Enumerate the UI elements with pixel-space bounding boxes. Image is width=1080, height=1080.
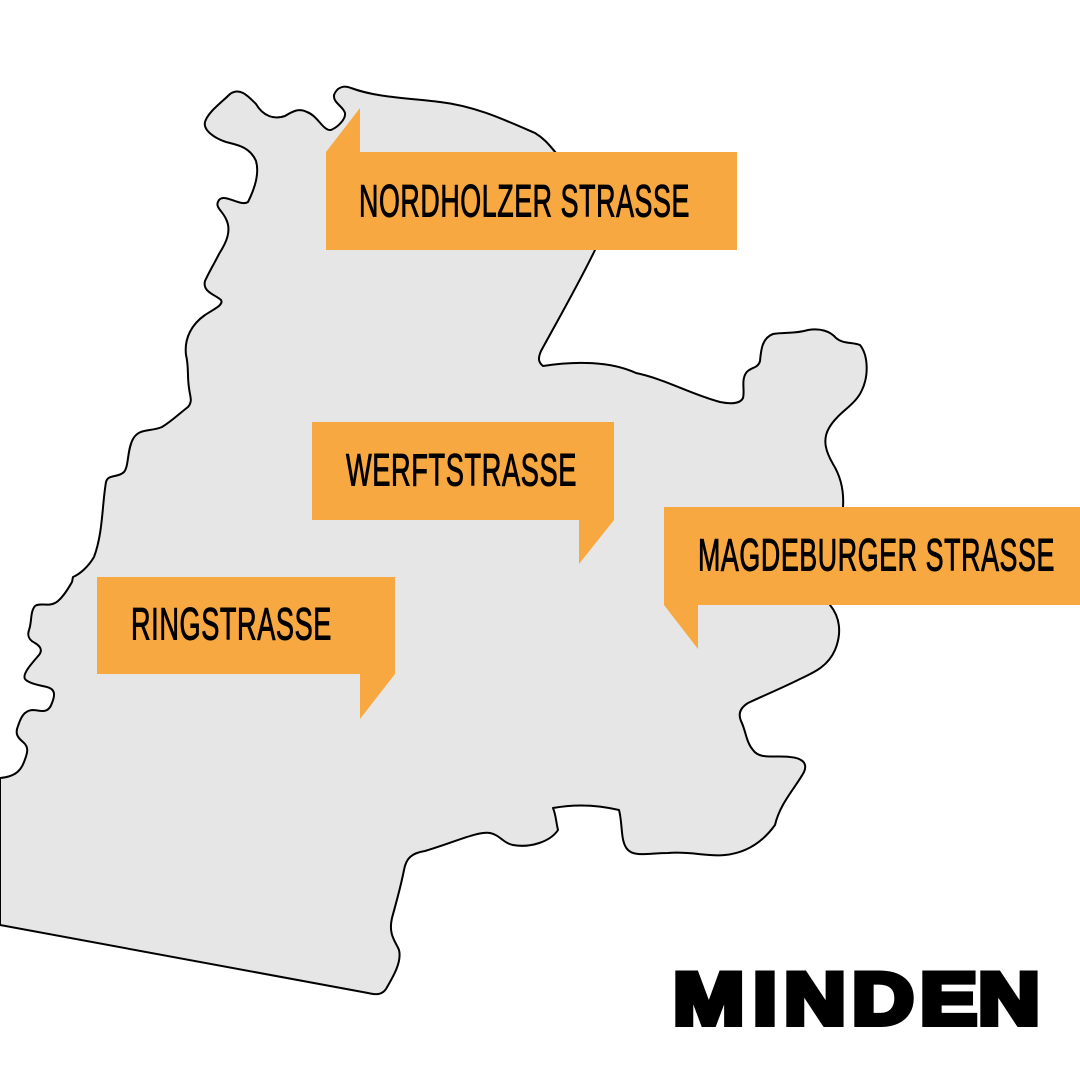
- callout: Ringstrasse: [97, 577, 395, 719]
- callout: Magdeburger Strasse: [664, 507, 1080, 649]
- callout: Ringstrasse: RINGSTRASSE: [131, 598, 332, 650]
- title: MINDEN: [673, 958, 1040, 1040]
- map: Minden district outline: [0, 87, 867, 994]
- callout: Werftstrasse: [312, 422, 614, 564]
- callout: Nordholzer Strasse: NORDHOLZER STRASSE: [359, 176, 690, 226]
- callout: Nordholzer Strasse: [326, 108, 737, 250]
- callout: Werftstrasse: WERFTSTRASSE: [346, 444, 577, 496]
